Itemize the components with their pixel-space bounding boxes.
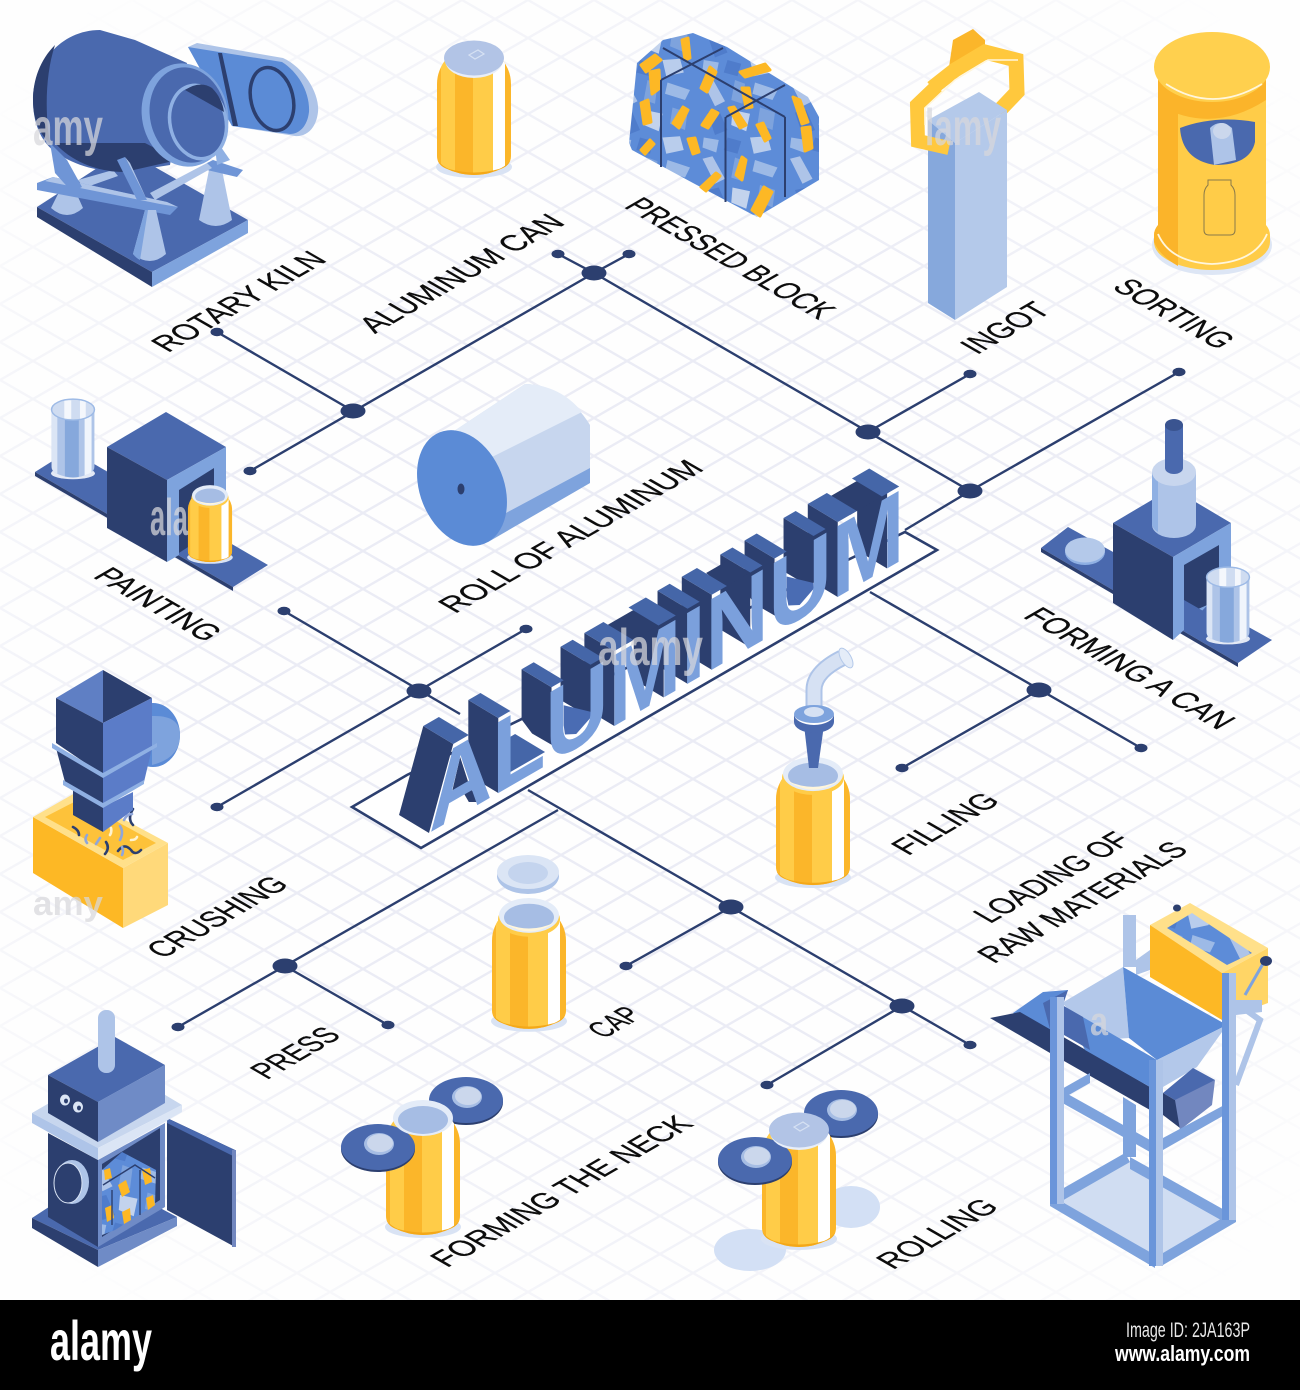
label: rotary kiln: ROTARY KILN: [143, 246, 334, 357]
kiln drum: [33, 30, 187, 172]
title: ALUMINUM: [399, 448, 904, 872]
label: painting: PAINTING: [86, 562, 231, 646]
icon: pressed block: [629, 33, 819, 217]
label: press: PRESS: [242, 1022, 348, 1084]
icon: crusher: [33, 670, 180, 928]
icon: aluminum can: [434, 38, 514, 183]
icon: rotary kiln: [33, 30, 318, 287]
label: pressed block: PRESSED BLOCK: [617, 192, 844, 324]
label: forming a can: FORMING A CAN: [1016, 602, 1244, 734]
kiln plate: [188, 43, 318, 136]
icon: loading of raw materials machine: [990, 903, 1272, 1268]
label: loading of raw materials: RAW MATERIALS: [969, 836, 1196, 968]
icon: forming the neck: [341, 1077, 503, 1243]
watermarks: ala: [150, 489, 189, 547]
icon: rolling: [714, 1090, 880, 1271]
icon: forming a can machine: [1041, 419, 1272, 667]
title frame: [352, 532, 937, 848]
icon: can with cap: [489, 855, 569, 1037]
back cones: [51, 188, 83, 215]
watermarks: [33, 99, 1109, 1044]
watermarks: amy: [33, 99, 103, 157]
label: crushing: CRUSHING: [138, 871, 296, 963]
label: loading of raw materials: LOADING OF: [965, 827, 1139, 928]
connector nodes: [172, 250, 1186, 1089]
front cone: [133, 210, 166, 261]
icon: press machine: [32, 1010, 236, 1267]
letter faces: ALUMINUM: [429, 465, 904, 855]
label: forming the neck: FORMING THE NECK: [422, 1110, 701, 1272]
watermarks: alamy: [598, 619, 703, 677]
label: filling: FILLING: [883, 787, 1008, 860]
label: cap: CAP: [579, 1001, 650, 1043]
watermarks: a: [1090, 1000, 1109, 1044]
icon: ingot with yellow tongs: [917, 29, 1018, 320]
footer bar: [0, 1300, 1300, 1390]
label: aluminum can: ALUMINUM CAN: [350, 209, 572, 338]
label: sorting: SORTING: [1105, 273, 1243, 354]
letter extrusions: [399, 451, 899, 850]
label: ingot: INGOT: [952, 297, 1058, 359]
label: roll of aluminum: ROLL OF ALUMINUM: [430, 455, 711, 618]
icon: filling can: [773, 646, 856, 893]
watermarks: lamy: [925, 99, 1001, 157]
footer logo: alamy: [50, 1309, 152, 1372]
icon: painting machine: [35, 398, 268, 591]
label: rolling: ROLLING: [868, 1193, 1006, 1274]
kiln mouth: [132, 55, 238, 175]
flowchart connector lines: [178, 254, 1179, 1085]
icon: sorting bin: [1152, 32, 1272, 275]
icon: roll of aluminum: [401, 384, 590, 559]
website: www.alamy.com: [1114, 1341, 1250, 1366]
watermarks: amy: [33, 885, 103, 923]
